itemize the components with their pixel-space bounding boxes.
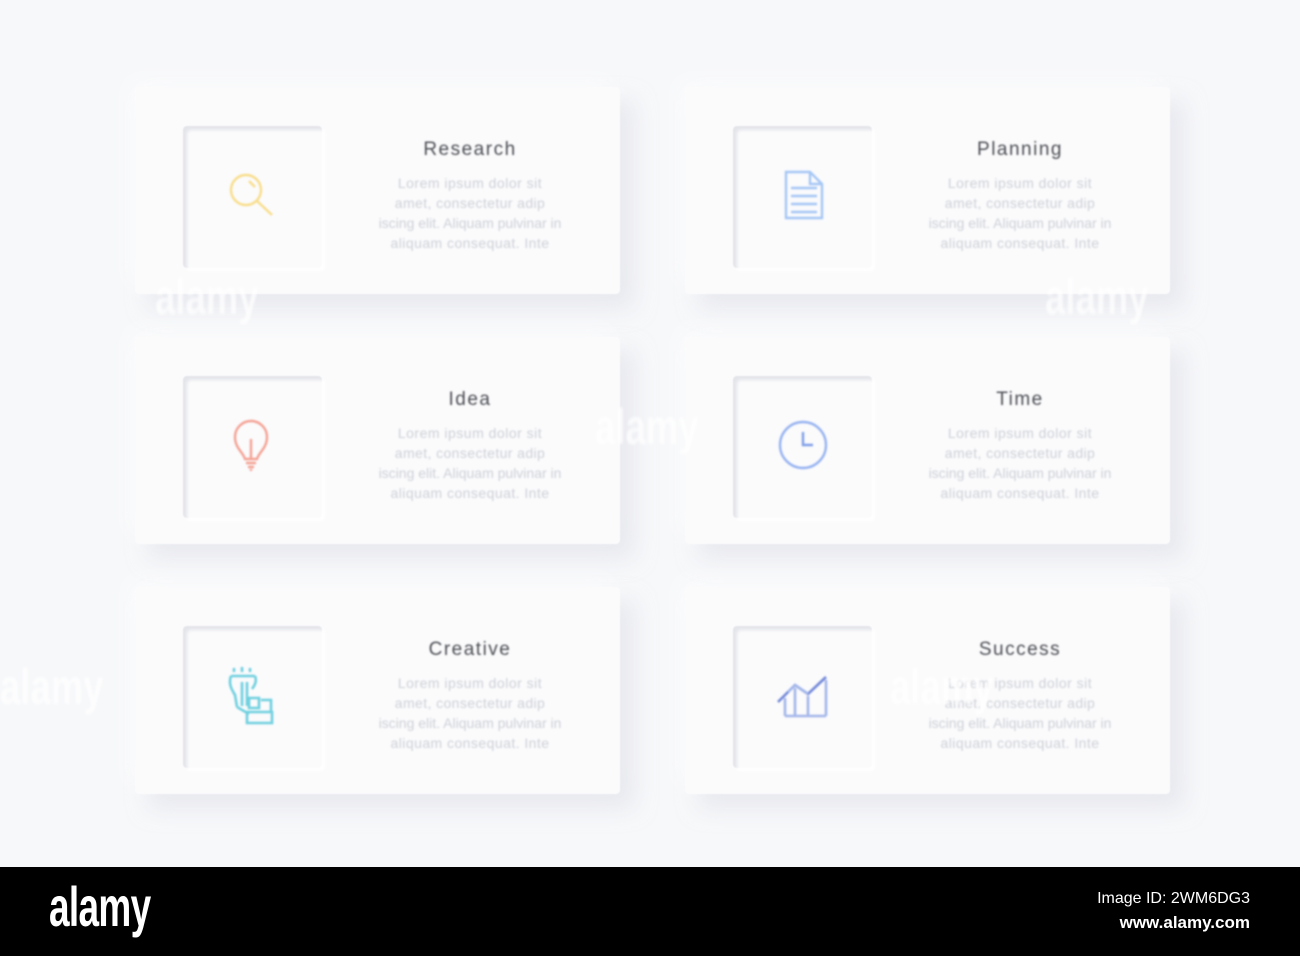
text: time: iscing elit. Aliquam pulvinar in [929, 465, 1111, 481]
image id: Image ID: 2WM6DG3 [1097, 890, 1250, 907]
text: idea: Lorem ipsum dolor sit [398, 425, 542, 441]
website: www.alamy.com [1120, 913, 1250, 932]
icon: magnifier [183, 126, 322, 268]
text: creative: iscing elit. Aliquam pulvinar in [379, 715, 561, 731]
text: research: amet, consectetur adip [395, 195, 545, 211]
icon: document [733, 126, 872, 268]
watermark: alamy [1045, 269, 1149, 325]
panel: idea [135, 337, 620, 544]
panel: time [685, 337, 1170, 544]
text: creative: aliquam consequat. Inte [390, 735, 550, 751]
text: idea: aliquam consequat. Inte [390, 485, 550, 501]
text: research: iscing elit. Aliquam pulvinar in [379, 215, 561, 231]
icon: creative hand and bulb [183, 626, 322, 768]
text: success: Lorem ipsum dolor sit [948, 675, 1092, 691]
icon: light bulb [183, 376, 322, 518]
text: planning: amet, consectetur adip [945, 195, 1095, 211]
text: time: amet, consectetur adip [945, 445, 1095, 461]
watermark: alamy [595, 399, 699, 455]
heading: idea: Idea [448, 389, 491, 410]
panel: research [135, 87, 620, 294]
text: success: aliquam consequat. Inte [940, 735, 1100, 751]
heading: success: Success [979, 639, 1061, 660]
text: time: Lorem ipsum dolor sit [948, 425, 1092, 441]
text: time [928, 425, 1112, 502]
watermark: alamy [155, 269, 259, 325]
text: research: aliquam consequat. Inte [390, 235, 550, 251]
text: planning [928, 175, 1112, 252]
watermark: alamy [0, 659, 104, 715]
text: planning: aliquam consequat. Inte [940, 235, 1100, 251]
text: creative [378, 675, 562, 752]
watermark: alamy [890, 659, 994, 715]
icon: clock [733, 376, 872, 518]
text: research: Lorem ipsum dolor sit [398, 175, 542, 191]
text: idea: iscing elit. Aliquam pulvinar in [379, 465, 561, 481]
panel: creative [135, 587, 620, 794]
heading: planning: Planning [977, 139, 1063, 160]
text: success [928, 675, 1112, 752]
text: idea [378, 425, 562, 502]
panel: planning [685, 87, 1170, 294]
panel: success [685, 587, 1170, 794]
text: creative: Lorem ipsum dolor sit [398, 675, 542, 691]
text: creative: amet, consectetur adip [395, 695, 545, 711]
icon: growth chart [733, 626, 872, 768]
text: success: iscing elit. Aliquam pulvinar in [929, 715, 1111, 731]
text: idea: amet, consectetur adip [395, 445, 545, 461]
text: planning: iscing elit. Aliquam pulvinar in [929, 215, 1111, 231]
heading: creative: Creative [429, 639, 511, 660]
heading: research: Research [423, 139, 517, 160]
text: time: aliquam consequat. Inte [940, 485, 1100, 501]
footer logo: alamy [49, 875, 151, 938]
footer bar [0, 867, 1300, 956]
text: planning: Lorem ipsum dolor sit [948, 175, 1092, 191]
heading: time: Time [996, 389, 1044, 410]
text: research [378, 175, 562, 252]
text: success: amet, consectetur adip [945, 695, 1095, 711]
